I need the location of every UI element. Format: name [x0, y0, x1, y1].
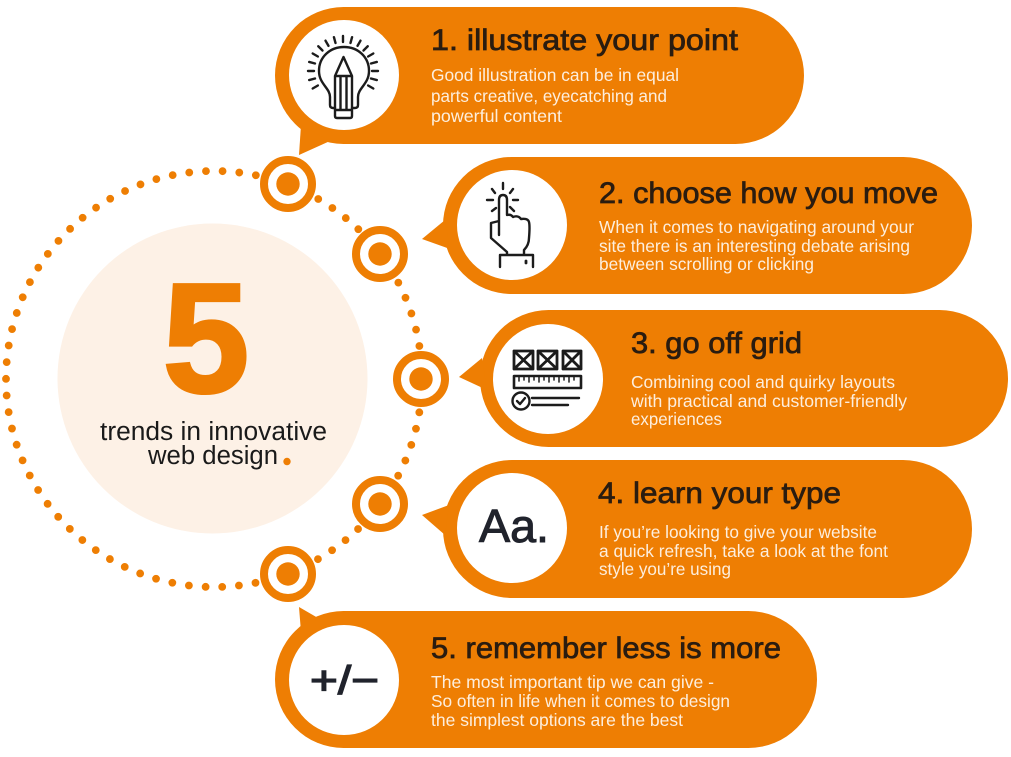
heading 2: 2. choose how you move [599, 177, 938, 210]
panel: learn your type [422, 460, 972, 598]
body text 3 [630, 372, 907, 429]
big number 5: 5 [163, 252, 249, 426]
icon disc [457, 170, 567, 280]
body text 1: parts creative, eyecatching and [431, 86, 667, 106]
body text 1: Good illustration can be in equal [431, 65, 679, 85]
panel: illustrate your point [275, 7, 804, 155]
body text 2: When it comes to navigating around your [599, 217, 914, 237]
speech bubble [459, 310, 1008, 447]
body text 2: site there is an interesting debate arising [599, 236, 910, 256]
body text 2 [599, 217, 914, 274]
body text 5 [431, 672, 730, 730]
body text 5: So often in life when it comes to design [431, 691, 730, 711]
body text 5: the simplest options are the best [431, 710, 683, 730]
speech bubble [422, 157, 972, 294]
body text 4: a quick refresh, take a look at the font [599, 541, 888, 561]
heading 3: 3. go off grid [631, 327, 802, 360]
body text 3: experiences [631, 409, 722, 429]
body text 3: Combining cool and quirky layouts [631, 372, 895, 392]
icon: plus minus sign: +/− [310, 659, 379, 703]
ring node 3 [397, 355, 445, 403]
heading 4: 4. learn your type [598, 477, 841, 510]
speech bubble [422, 460, 972, 598]
heading 5: 5. remember less is more [431, 632, 781, 665]
ring node 4 [356, 480, 404, 528]
dotted ring [6, 171, 422, 587]
icon disc [289, 20, 399, 130]
body text 4: style you’re using [599, 559, 731, 579]
speech bubble [275, 607, 817, 748]
icon disc [493, 324, 603, 434]
icon: layout grid with ruler and checklist [512, 351, 581, 410]
central caption: trends in innovative [100, 418, 327, 446]
body text 3: with practical and customer-friendly [630, 391, 907, 411]
body text 4: If you’re looking to give your website [599, 522, 877, 542]
icon disc [289, 625, 399, 735]
body text 5: The most important tip we can give - [431, 672, 714, 692]
panel: go off grid [459, 310, 1008, 447]
panel: remember less is more [275, 607, 817, 748]
ring node 1 [264, 160, 312, 208]
speech bubble [275, 7, 804, 155]
icon disc [457, 473, 567, 583]
central caption [100, 418, 327, 470]
heading 1: 1. illustrate your point [431, 24, 739, 57]
body text 1: powerful content [431, 106, 562, 126]
body text 4 [599, 522, 888, 579]
icon: light bulb with pencil [308, 36, 378, 118]
ring node 5 [264, 550, 312, 598]
caption dot [283, 458, 291, 465]
panel: choose how you move [422, 157, 972, 294]
ring node 2 [356, 230, 404, 278]
icon: pointing hand [487, 183, 533, 267]
body text 2: between scrolling or clicking [599, 254, 814, 274]
cream circle [58, 224, 368, 534]
body text 1 [431, 65, 679, 126]
central caption: web design [147, 442, 278, 470]
icon: Aa. type sample: Aa. [479, 500, 549, 552]
central panel [58, 224, 368, 534]
